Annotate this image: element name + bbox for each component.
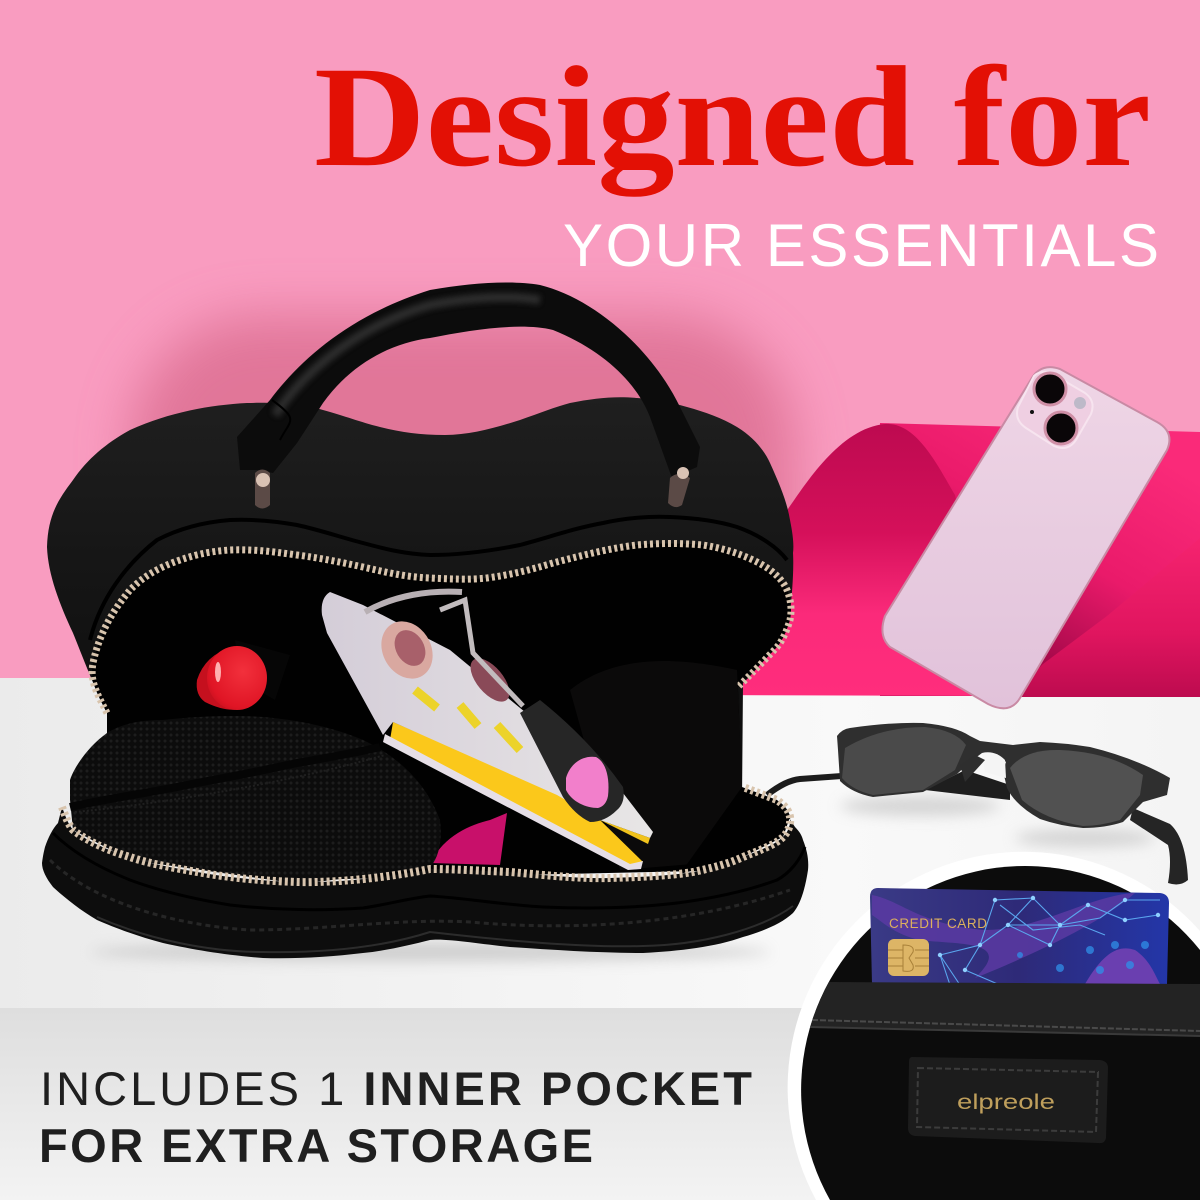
card label: CREDIT CARD bbox=[889, 916, 987, 931]
lipstick bbox=[197, 640, 290, 710]
credit card bbox=[870, 888, 1169, 985]
card chip bbox=[888, 939, 929, 976]
heading: Designed for: Designed for bbox=[314, 38, 1151, 197]
background: pink wall bbox=[0, 0, 1200, 700]
sunglasses bbox=[767, 723, 1188, 884]
left lens bbox=[842, 727, 966, 795]
lower piping lines bbox=[50, 833, 805, 952]
lower inner black bbox=[680, 787, 790, 874]
lower zipper bbox=[62, 787, 790, 882]
subheading: your essentials: YOUR ESSENTIALS bbox=[563, 212, 1159, 279]
background: grey base band bbox=[0, 1008, 1200, 1200]
caption: inner pocket: INCLUDES 1 INNER POCKET bbox=[40, 1062, 752, 1115]
handle ring right bbox=[668, 467, 690, 507]
inner soft lining bbox=[570, 661, 742, 870]
bag lower shell bbox=[42, 800, 808, 958]
background: magenta paper roll bbox=[700, 423, 1200, 697]
bag handle bbox=[237, 283, 700, 508]
keychain bbox=[365, 592, 624, 822]
title bbox=[314, 38, 1159, 279]
caption: inner pocket: FOR EXTRA STORAGE bbox=[39, 1119, 593, 1172]
inset dark velvet bbox=[801, 866, 1200, 1200]
brand tag bbox=[908, 1057, 1108, 1143]
bag shadow on wall bbox=[130, 315, 795, 705]
bag upper shell bbox=[47, 397, 793, 800]
right lens bbox=[1010, 750, 1143, 826]
pocket leather band bbox=[808, 982, 1200, 1036]
caption: inner pocket bbox=[39, 1062, 752, 1172]
background: white table bbox=[0, 678, 1200, 1010]
upper zipper bbox=[92, 544, 791, 713]
upper piping bbox=[90, 517, 787, 640]
brand tag: elpreole bbox=[957, 1091, 1055, 1114]
handle ring left bbox=[255, 470, 270, 508]
phone camera bump bbox=[1017, 372, 1093, 448]
bag interior bbox=[92, 544, 791, 880]
bag floor shadow bbox=[90, 943, 770, 961]
phone bbox=[882, 367, 1169, 708]
heart charm bbox=[566, 757, 608, 808]
inset white ring bbox=[788, 852, 1200, 1200]
mesh case bbox=[70, 716, 441, 884]
pink item bbox=[430, 813, 507, 865]
wallet bbox=[322, 592, 653, 870]
handbag bbox=[42, 283, 808, 961]
inset circle: inner pocket bbox=[788, 852, 1200, 1200]
